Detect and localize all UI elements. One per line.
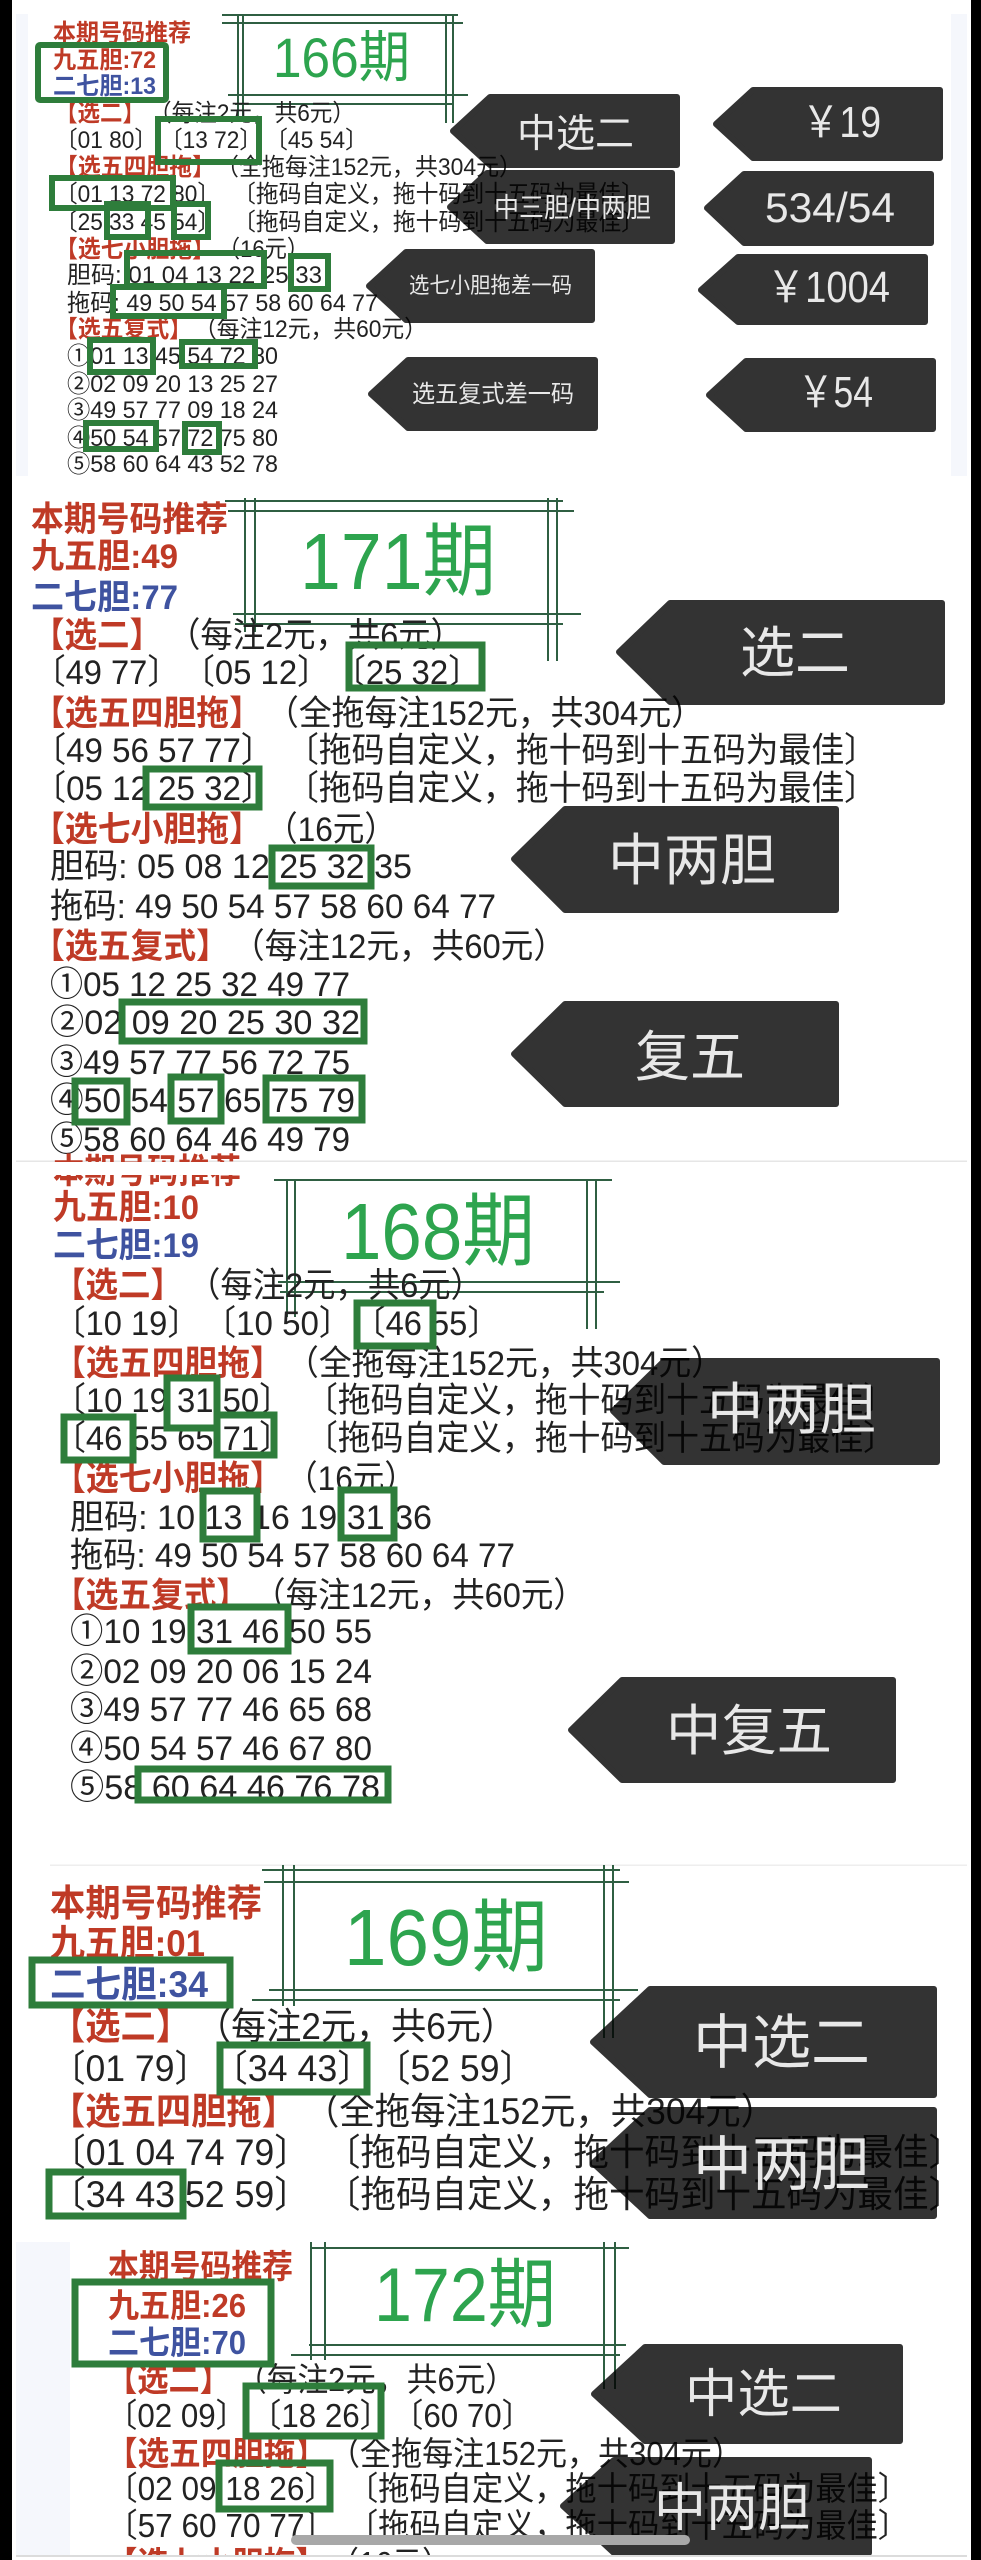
pick-five four-banker section: 〔01 04 74 79〕	[50, 2132, 310, 2173]
pick-two section	[53, 1267, 500, 1343]
pick-seven section	[55, 236, 378, 317]
pick-two section: 〔34 43〕	[212, 2048, 373, 2089]
pick-two section: 〔60 70〕	[392, 2397, 533, 2434]
pick-five four-banker section: 〔拖码自定义，拖十码到十五码为最佳〕	[325, 2174, 964, 2215]
green highlight boxes	[32, 1960, 367, 2216]
pick-five compound section: ②02 09 20 25 30 32	[50, 1004, 360, 1042]
pick-five compound section: 【选五复式】	[53, 1577, 249, 1615]
arrow: prize 54	[709, 361, 933, 429]
arrow: prize 1004	[701, 257, 925, 322]
panel: issue 172	[12, 2242, 971, 2560]
pick-two section: 〔18 26〕	[250, 2397, 391, 2434]
pick-two section: 〔13 72〕	[160, 127, 262, 154]
heading: recommendation numbers: 九五胆:26	[108, 2287, 246, 2324]
pick-two section: 【选二】	[106, 2361, 231, 2398]
heading: recommendation numbers	[53, 20, 191, 100]
period title frame: 168期	[341, 1187, 535, 1276]
pick-seven section: 胆码: 05 08 12 25 32 35	[50, 848, 412, 886]
pick-five four-banker section: （全拖每注152元，共304元）	[266, 695, 704, 733]
pick-two section: 〔01 79〕	[50, 2048, 210, 2089]
heading: recommendation numbers: 二七胆:19	[53, 1227, 199, 1265]
panel: issue 166	[38, 14, 940, 478]
pick-five compound section	[32, 928, 566, 1159]
arrow: pick-five one short	[371, 360, 595, 428]
arrow: prize 1004: ￥1004	[767, 263, 890, 312]
pick-two section: （每注2元，共6元）	[168, 617, 463, 655]
pick-seven section	[53, 1460, 515, 1575]
pick-seven section: （16元）	[218, 236, 309, 263]
heading: recommendation numbers	[50, 1883, 262, 2005]
heading: recommendation numbers: 本期号码推荐	[50, 1883, 262, 1924]
pick-seven section: 拖码: 49 50 54 57 58 60 64 77	[70, 1537, 515, 1575]
pick-five compound section: ③49 57 77 09 18 24	[67, 397, 278, 424]
arrow: pick-two hit	[453, 97, 677, 165]
pick-five four-banker section: 【选五四胆拖】	[106, 2435, 327, 2472]
pick-five four-banker section: （全拖每注152元，共304元）	[304, 2091, 776, 2132]
pick-five four-banker section: 〔25 33 45 54〕	[55, 209, 220, 236]
heading: recommendation numbers: 本期号码推荐	[53, 20, 191, 47]
pick-five four-banker section: 〔57 60 70 77〕	[106, 2507, 336, 2544]
arrow: prize 19	[716, 90, 940, 158]
heading: recommendation numbers: 九五胆:72	[53, 47, 156, 74]
pick-five four-banker section: 〔05 12 25 32〕	[33, 770, 274, 808]
pick-five compound section: ④50 54 57 72 75 80	[67, 425, 278, 452]
pick-seven section: 【选七小胆拖】	[55, 236, 215, 263]
pick-five four-banker section	[50, 2091, 964, 2215]
arrow: three or two bankers hit: 中三胆/中两胆	[494, 193, 651, 223]
arrow: prize 534/54: 534/54	[765, 184, 895, 231]
pick-five four-banker section	[32, 695, 877, 808]
pick-two section: 〔10 19〕	[53, 1305, 200, 1343]
pick-two section: 【选二】	[50, 2006, 191, 2047]
heading: recommendation numbers: 二七胆:77	[31, 579, 178, 617]
pick-five four-banker section	[55, 154, 644, 236]
pick-five compound section: ③49 57 77 56 72 75	[50, 1044, 350, 1082]
period title frame: 171期	[300, 517, 496, 606]
pick-five compound section: ①01 13 45 54 72 80	[67, 343, 278, 370]
arrow: two bankers hit: 中两胆	[654, 2480, 810, 2538]
pick-five four-banker section: 〔46 55 65 71〕	[53, 1420, 292, 1458]
green highlight boxes	[64, 1303, 433, 1800]
pick-five compound section	[55, 316, 427, 478]
arrow: prize 534/54	[707, 174, 931, 243]
pick-five compound section: （每注12元，共60元）	[194, 316, 427, 343]
pick-seven section: 拖码: 49 50 54 57 58 60 64 77	[67, 290, 378, 317]
heading: recommendation numbers: 二七胆:70	[108, 2324, 246, 2361]
pick-five four-banker section	[106, 2435, 909, 2544]
pick-five four-banker section: 〔拖码自定义，拖十码到十五码为最佳〕	[347, 2507, 909, 2544]
pick-five compound section: 【选五复式】	[32, 928, 229, 966]
green highlight boxes	[75, 645, 482, 1122]
pick-five four-banker section: 〔拖码自定义，拖十码到十五码为最佳〕	[286, 770, 877, 808]
pick-five compound section: ⑤58 60 64 46 76 78	[70, 1769, 380, 1807]
pick-five four-banker section: 【选五四胆拖】	[53, 1345, 283, 1383]
pick-five compound section: ①10 19 31 46 50 55	[70, 1613, 372, 1651]
arrow: prize 54: ￥54	[798, 368, 873, 417]
pick-seven section: （16元）	[266, 811, 396, 849]
pick-five four-banker section: 〔10 19 31 50〕	[53, 1382, 292, 1420]
pick-two section: （每注2元，共6元）	[196, 2006, 516, 2047]
arrow: pick two: 选二	[740, 622, 850, 684]
pick-seven section: 【选七小胆拖】	[53, 1460, 283, 1498]
pick-two section	[32, 617, 481, 692]
arrow: two bankers hit	[613, 1361, 937, 1462]
pick-five four-banker section: 〔拖码自定义，拖十码到十五码为最佳〕	[325, 2132, 964, 2173]
pick-two section: 〔25 32〕	[333, 654, 481, 692]
arrow: pick two	[619, 603, 942, 702]
panel: issue 168	[40, 1153, 937, 1807]
pick-five four-banker section: （全拖每注152元，共304元）	[216, 154, 522, 181]
pick-seven section: 【选七小胆拖】	[32, 811, 262, 849]
pick-two section: 〔01 80〕	[55, 127, 157, 154]
pick-five four-banker section: 【选五四胆拖】	[50, 2091, 297, 2132]
panel: issue 169	[32, 1865, 964, 2216]
arrow: two bankers hit	[514, 809, 836, 910]
pick-five four-banker section: 〔49 56 57 77〕	[33, 732, 274, 770]
pick-two section: 〔10 50〕	[203, 1305, 352, 1343]
pick-five four-banker section: 〔拖码自定义，拖十码到十五码为最佳〕	[305, 1382, 896, 1420]
panel: issue 171	[31, 498, 942, 1159]
pick-five compound section: ①05 12 25 32 49 77	[50, 966, 350, 1004]
arrow: pick-two hit: 中选二	[693, 2010, 870, 2076]
arrow: two bankers hit: 中两胆	[693, 2132, 870, 2198]
pick-five compound section: 【选五复式】	[55, 316, 192, 343]
heading: recommendation numbers: 本期号码推荐	[53, 1153, 241, 1191]
pick-five compound section: ③49 57 77 46 65 68	[70, 1691, 372, 1729]
heading: recommendation numbers: 九五胆:10	[53, 1189, 199, 1227]
arrow: compound five hit: 中复五	[666, 1700, 832, 1762]
pick-seven section: 胆码: 01 04 13 22 25 33	[67, 262, 322, 289]
pick-five four-banker section: 〔34 43 52 59〕	[50, 2174, 310, 2215]
scrollbar	[291, 2535, 690, 2545]
heading: recommendation numbers: 九五胆:49	[31, 538, 178, 576]
arrow: pick-seven one short: 选七小胆拖差一码	[409, 273, 572, 298]
pick-five compound section: ②02 09 20 13 25 27	[67, 371, 278, 398]
pick-five compound section: ②02 09 20 06 15 24	[70, 1653, 372, 1691]
pick-two section: （每注2元，共6元）	[149, 100, 355, 127]
arrow: pick-two hit	[594, 2347, 900, 2441]
pick-two section: 〔46 55〕	[353, 1305, 500, 1343]
period title frame: 166期	[273, 26, 410, 89]
heading: recommendation numbers: 二七胆:34	[50, 1964, 208, 2005]
pick-seven section: 胆码: 10 13 16 19 31 36	[70, 1499, 432, 1537]
period title frame: 169期	[344, 1893, 548, 1982]
arrow: two bankers hit	[563, 2460, 869, 2553]
pick-seven section: （16元）	[286, 1460, 416, 1498]
pick-two section: （每注2元，共6元）	[236, 2361, 516, 2398]
arrow: pick-two hit	[593, 1989, 934, 2095]
arrow: pick-two hit: 中选二	[517, 113, 634, 156]
pick-two section	[50, 2006, 535, 2089]
heading: recommendation numbers	[31, 501, 228, 617]
period title frame: 172期	[374, 2253, 556, 2338]
pick-five four-banker section: 〔拖码自定义，拖十码到十五码为最佳〕	[286, 732, 877, 770]
pick-five compound section: ⑤58 60 64 43 52 78	[67, 451, 278, 478]
heading: recommendation numbers: 本期号码推荐	[108, 2248, 293, 2285]
pick-five four-banker section: 〔01 13 72 80〕	[55, 181, 220, 208]
pick-five compound section: ④50 54 57 65 75 79	[50, 1082, 355, 1120]
clipped pick-seven heading	[12, 2545, 971, 2560]
pick-five four-banker section: 〔拖码自定义，拖十码到十五码为最佳〕	[347, 2470, 909, 2507]
pick-five compound section: （每注12元，共60元）	[253, 1577, 586, 1615]
pick-two section: 【选二】	[32, 617, 162, 655]
arrow: compound five hit	[571, 1680, 893, 1780]
pick-two section: 〔49 77〕	[33, 654, 180, 692]
pick-five four-banker section: （全拖每注152元，共304元）	[329, 2435, 743, 2472]
arrow: two bankers hit: 中两胆	[608, 829, 776, 892]
green highlight boxes	[75, 2282, 381, 2509]
heading: recommendation numbers: 九五胆:01	[50, 1923, 205, 1964]
blue banker number inside highlight box: 二七胆:34	[50, 1964, 208, 2005]
pick-seven section	[32, 811, 496, 926]
pick-five four-banker section: 〔拖码自定义，拖十码到十五码为最佳〕	[233, 181, 644, 208]
pick-five four-banker section: 【选五四胆拖】	[55, 154, 215, 181]
pick-five compound section: ④50 54 57 46 67 80	[70, 1730, 372, 1768]
pick-two section	[55, 100, 368, 154]
arrow: pick-five one short: 选五复式差一码	[412, 381, 574, 408]
arrow: compound five	[514, 1004, 836, 1104]
pick-five compound section: （每注12元，共60元）	[232, 928, 566, 966]
pick-seven section: 拖码: 49 50 54 57 58 60 64 77	[50, 888, 496, 926]
pick-two section: 〔45 54〕	[265, 127, 368, 154]
arrow: prize 19: ￥19	[802, 98, 881, 147]
pick-five compound section: ⑤58 60 64 46 49 79	[50, 1121, 350, 1159]
pick-five four-banker section: （全拖每注152元，共304元）	[286, 1345, 724, 1383]
pick-five four-banker section: 〔拖码自定义，拖十码到十五码为最佳〕	[305, 1420, 896, 1458]
pick-five four-banker section	[53, 1345, 896, 1458]
pick-five compound section	[53, 1577, 586, 1807]
pick-two section: （每注2元，共6元）	[188, 1267, 483, 1305]
arrow: pick-two hit: 中选二	[685, 2366, 842, 2424]
green highlight boxes	[38, 45, 328, 452]
pick-five four-banker section: 〔拖码自定义，拖十码到十五码为最佳〕	[233, 209, 644, 236]
arrow: compound five: 复五	[635, 1026, 745, 1088]
heading: recommendation numbers	[108, 2248, 293, 2361]
arrow: three or two bankers hit	[450, 173, 672, 241]
pick-five four-banker section: 〔02 09 18 26〕	[106, 2470, 336, 2507]
arrow: two bankers hit	[593, 2110, 934, 2216]
pick-two section	[106, 2361, 533, 2434]
heading: recommendation numbers	[40, 1153, 260, 1265]
heading: recommendation numbers: 本期号码推荐	[31, 501, 228, 539]
pick-two section: 【选二】	[53, 1267, 183, 1305]
pick-two section: 〔52 59〕	[375, 2048, 535, 2089]
pick-two section: 〔02 09〕	[106, 2397, 247, 2434]
arrow: two bankers hit: 中两胆	[707, 1378, 876, 1441]
heading: recommendation numbers: 二七胆:13	[53, 73, 156, 100]
pick-five four-banker section: 【选五四胆拖】	[32, 695, 262, 733]
pick-two section: 〔05 12〕	[182, 654, 330, 692]
pick-two section: 【选二】	[55, 100, 145, 127]
arrow: pick-seven one short	[369, 252, 592, 320]
